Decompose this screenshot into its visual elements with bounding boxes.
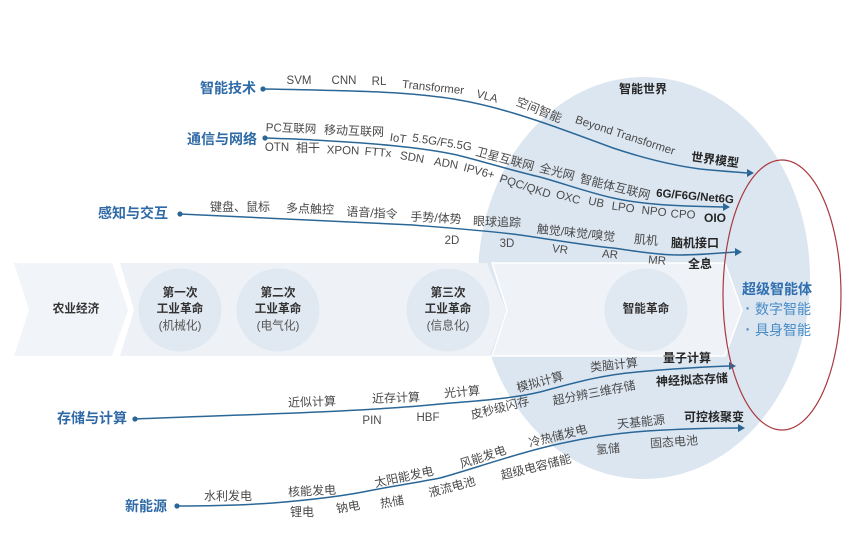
- circle: second industrial revolution: [236, 268, 320, 352]
- items above: 全光网: [538, 160, 576, 183]
- items: [287, 75, 740, 170]
- circle: intelligent revolution: [604, 268, 688, 352]
- chevron: agricultural economy: [14, 263, 128, 356]
- text block: super agent: ·: [746, 322, 750, 338]
- items below: 超级电容储能: [499, 451, 573, 483]
- items below: 液流电池: [427, 473, 477, 500]
- items above: [204, 409, 744, 503]
- items below: [445, 235, 712, 271]
- items above: 手势/体势: [410, 210, 462, 226]
- items above: 模拟计算: [515, 368, 565, 395]
- items above: 键盘、鼠标: [210, 199, 270, 214]
- items below: OIO: [704, 211, 726, 225]
- items above: 智能体互联网: [578, 171, 652, 203]
- items below: 热储: [379, 492, 405, 511]
- items above: 近存计算: [372, 389, 420, 406]
- items above: 5.5G/F5.5G: [411, 132, 473, 154]
- circle: second industrial revolution: 工业革命: [255, 302, 302, 316]
- curve with arrow: [174, 424, 745, 509]
- items below: FTTx: [364, 146, 392, 160]
- items below: 2D: [445, 235, 459, 247]
- items below: HBF: [416, 412, 440, 424]
- items below: SDN: [399, 150, 425, 166]
- heading: communication and network: 通信与网络: [187, 131, 257, 147]
- text block: super agent: 具身智能: [755, 322, 811, 338]
- items above: 类脑计算: [589, 355, 639, 374]
- items below: MR: [648, 254, 666, 268]
- circle: third industrial revolution: [406, 268, 490, 352]
- items below: OTN: [265, 142, 289, 154]
- items below: 固态电池: [650, 433, 698, 451]
- items below: PIN: [362, 415, 382, 427]
- chevron: intelligent revolution: [492, 263, 742, 356]
- items below: AR: [602, 248, 618, 262]
- circle: third industrial revolution: 工业革命: [425, 302, 472, 316]
- items above: 6G/F6G/Net6G: [656, 188, 734, 206]
- items below: [362, 370, 728, 427]
- items above: 触觉/味觉/嗅觉: [536, 222, 616, 244]
- items above: 冷热储发电: [527, 421, 589, 450]
- heading: intelligent technology: 智能技术: [200, 80, 256, 96]
- text block: super agent: 超级智能体: [742, 281, 812, 297]
- curve with arrow: [262, 135, 730, 211]
- text block: super agent: [742, 281, 812, 338]
- items above: 脑机接口: [671, 235, 719, 250]
- items above: [266, 120, 734, 206]
- items above: 光计算: [443, 382, 481, 401]
- items: RL: [372, 76, 387, 88]
- circle: second industrial revolution: (电气化): [257, 318, 300, 332]
- circle: third industrial revolution: 第三次: [430, 286, 466, 300]
- items below: 3D: [500, 238, 514, 250]
- track: storage and computing: [57, 350, 736, 427]
- items above: [210, 199, 719, 250]
- items: Transformer: [401, 79, 465, 97]
- track: intelligent technology: [200, 75, 754, 177]
- text: agricultural economy: 农业经济: [53, 302, 100, 316]
- items: CNN: [332, 75, 356, 87]
- items below: CPO: [670, 208, 696, 222]
- items above: 多点触控: [286, 201, 334, 217]
- heading: storage and computing: 存储与计算: [57, 410, 127, 426]
- items above: 可控核聚变: [684, 409, 744, 424]
- track: perception and interaction: [98, 199, 742, 271]
- heading: perception and interaction: 感知与交互: [98, 205, 168, 221]
- items above: 近似计算: [288, 393, 336, 410]
- heading: intelligent world: 智能世界: [619, 81, 667, 96]
- chevron: three industrial revolutions: [120, 263, 506, 356]
- track: communication and network: [187, 120, 734, 225]
- items above: 太阳能发电: [373, 463, 435, 490]
- items above: 核能发电: [288, 482, 336, 499]
- callout: super agent ellipse: [723, 160, 841, 430]
- items above: 肌机: [633, 232, 659, 248]
- items below: 全息: [688, 256, 712, 271]
- items above: 移动互联网: [324, 123, 384, 139]
- items below: PQC/QKD: [498, 173, 552, 201]
- items below: XPON: [327, 144, 359, 158]
- items: SVM: [287, 75, 311, 87]
- items: 世界模型: [690, 149, 740, 170]
- circle: first industrial revolution: (机械化): [159, 318, 202, 332]
- items above: 水利发电: [204, 488, 252, 503]
- items below: OXC: [554, 189, 582, 207]
- heading: new energy: 新能源: [125, 498, 167, 514]
- circle: first industrial revolution: [138, 268, 222, 352]
- panel: era chevron band: [14, 263, 742, 356]
- track: new energy: [125, 409, 745, 519]
- text block: super agent: 数字智能: [755, 301, 811, 317]
- items below: 氢储: [595, 440, 621, 457]
- items below: ADN: [433, 156, 459, 172]
- items above: [288, 350, 711, 410]
- items below: LPO: [611, 200, 635, 216]
- items above: 眼球追踪: [473, 213, 521, 230]
- items below: 钠电: [335, 497, 361, 516]
- items above: 语音/指令: [346, 204, 398, 221]
- circle: first industrial revolution: 工业革命: [157, 302, 204, 316]
- text block: super agent: ·: [746, 300, 750, 318]
- items below: IPV6+: [462, 162, 496, 182]
- items: Beyond Transformer: [574, 114, 677, 158]
- items above: 风能发电: [458, 442, 508, 471]
- items above: 卫星互联网: [474, 144, 536, 174]
- items below: NPO: [641, 205, 667, 219]
- circle: first industrial revolution: 第一次: [162, 286, 198, 300]
- items above: PC互联网: [266, 120, 317, 136]
- items above: 天基能源: [616, 413, 666, 431]
- items below: 皮秒级闪存: [469, 394, 531, 422]
- circle: intelligent revolution: 智能革命: [623, 302, 670, 316]
- items: 空间智能: [514, 94, 564, 125]
- items: VLA: [475, 88, 499, 106]
- circle: third industrial revolution: (信息化): [427, 318, 470, 332]
- items below: 锂电: [290, 504, 314, 519]
- circle: second industrial revolution: 第二次: [260, 286, 296, 300]
- items below: 相干: [296, 141, 320, 155]
- items below: 超分辨三维存储: [551, 377, 637, 408]
- items above: IoT: [389, 132, 407, 146]
- curve with arrow: [177, 211, 742, 256]
- items above: 量子计算: [663, 350, 711, 365]
- curve with arrow: [260, 86, 754, 177]
- items below: 神经拟态存储: [656, 370, 728, 389]
- items below: UB: [587, 195, 605, 211]
- curve with arrow: [132, 362, 736, 422]
- items below: [290, 433, 698, 519]
- items below: [265, 141, 726, 225]
- items below: VR: [551, 243, 569, 257]
- background circle: intelligent world: [478, 77, 810, 479]
